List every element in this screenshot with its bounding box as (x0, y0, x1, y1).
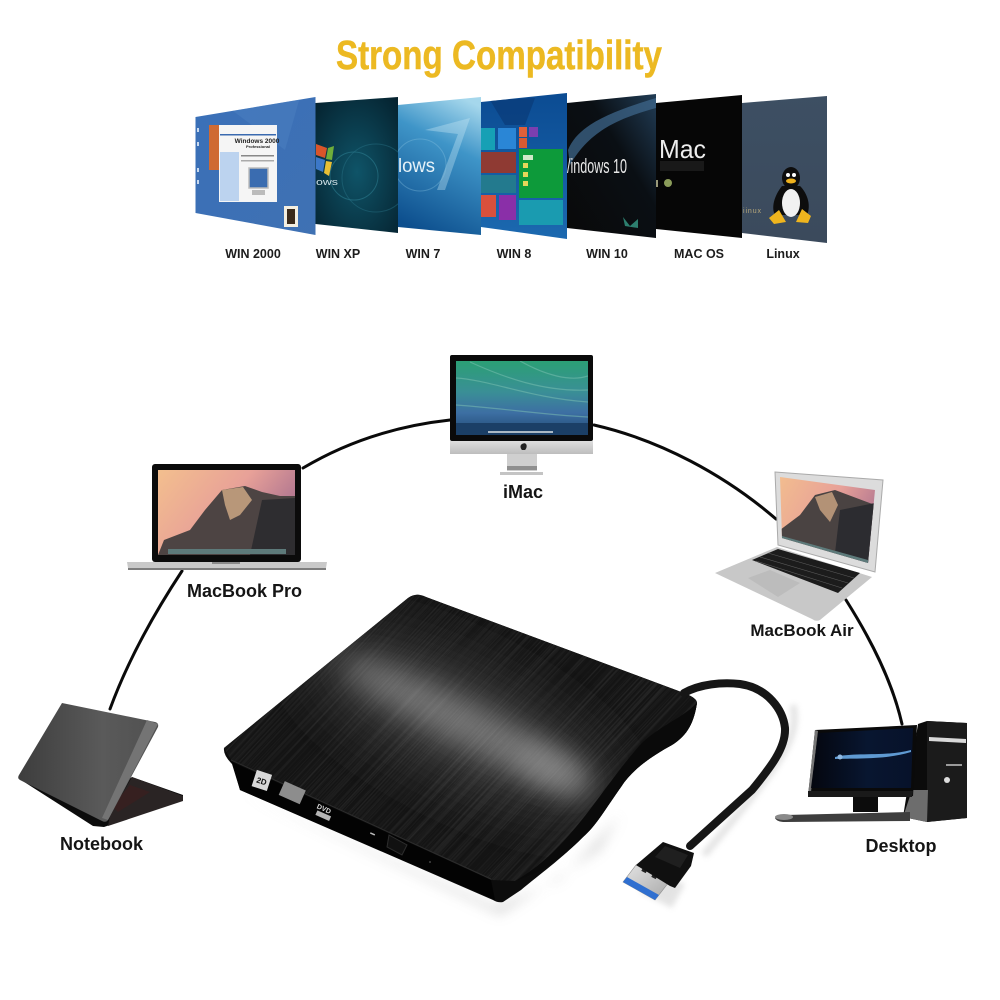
OS labels: WIN XP (316, 247, 360, 261)
screen: WIN 10: /indows 10 (567, 156, 627, 178)
device: MacBook Air (715, 472, 883, 621)
screen: WIN 2000: Windows 2000 (235, 138, 280, 145)
USB cable (684, 683, 785, 846)
monitor (808, 725, 917, 796)
drive front panel (232, 762, 495, 900)
screen: WIN XP: ows (316, 177, 339, 187)
screen: WIN 2000 (195, 95, 317, 237)
label: MacBook Air: MacBook Air (750, 621, 854, 640)
drive body (224, 595, 697, 902)
OS labels: WIN 2000 (225, 247, 281, 261)
tower (903, 721, 967, 822)
screen: WIN XP (316, 97, 398, 233)
screen: WIN 7 (394, 95, 482, 237)
device: iMac (450, 355, 593, 475)
device: Desktop (775, 721, 967, 822)
USB plug (623, 842, 694, 908)
MacBook Air screen (780, 477, 875, 563)
screen: WIN 7: lows (398, 156, 435, 177)
OS labels: MAC OS (674, 247, 724, 261)
panel: OS screens row (195, 92, 828, 244)
OS labels: Linux (766, 247, 800, 261)
screen: WIN 2000: Professional (246, 144, 270, 149)
screen: WIN 10 (567, 92, 657, 240)
drive right side (515, 703, 697, 881)
OS labels: WIN 10 (586, 247, 628, 261)
keyboard (775, 812, 910, 822)
screen: Linux: iinux (743, 208, 762, 215)
screen: Linux (742, 94, 828, 244)
drive shadow (236, 790, 620, 915)
drive logos: 2D (255, 776, 268, 787)
label: MacBook Pro: MacBook Pro (187, 581, 302, 601)
product: slim optical drive (224, 594, 799, 916)
iMac screen wallpaper (456, 361, 588, 435)
drive logos: DVD (315, 803, 332, 816)
OS labels: WIN 8 (497, 247, 531, 261)
OS labels: WIN 7 (406, 247, 440, 261)
device: MacBook Pro (127, 464, 327, 570)
eject button (387, 835, 407, 855)
keyboard (752, 549, 860, 593)
OS labels (225, 247, 800, 261)
screen: WIN 8 (481, 92, 568, 240)
label: Notebook: Notebook (60, 834, 144, 854)
title: Strong Compatibility (336, 32, 662, 78)
screen: MAC OS: Mac (659, 134, 706, 164)
drive logos (252, 770, 332, 821)
label: Desktop: Desktop (865, 836, 937, 856)
connection arcs (110, 420, 902, 724)
screen: MAC OS (656, 92, 743, 240)
drive top surface with brushed highlight (224, 594, 697, 881)
label: iMac: iMac (503, 482, 543, 502)
MacBook Pro screen (158, 470, 295, 555)
icon: tux penguin (769, 167, 811, 224)
device: Notebook (18, 703, 183, 827)
